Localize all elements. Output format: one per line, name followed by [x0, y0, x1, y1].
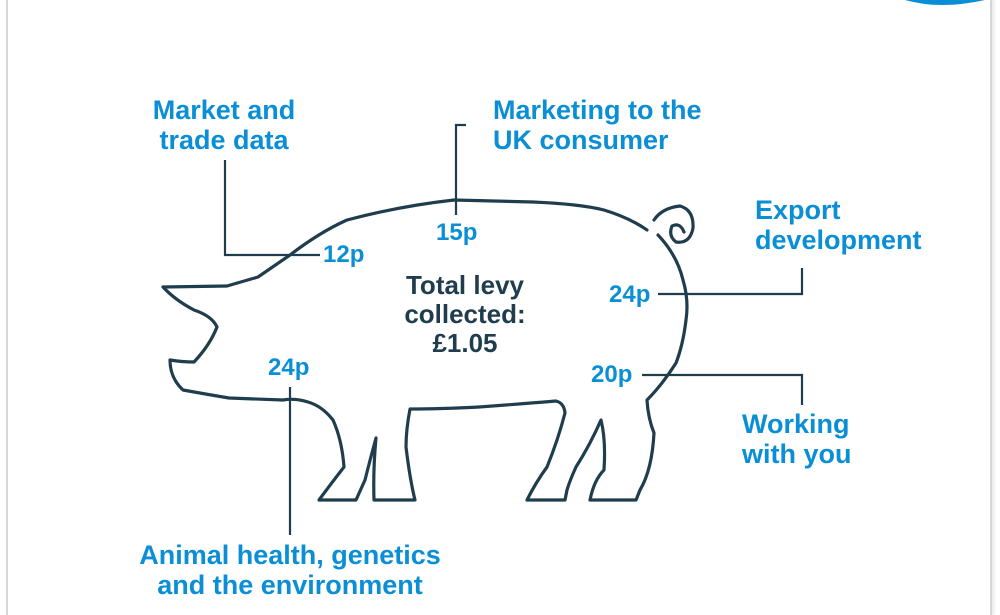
label: Marketing to the UK consumer	[493, 95, 702, 155]
value 15p: 15p	[436, 219, 477, 246]
label: Export development: development	[755, 225, 922, 255]
label: Working with you: with you	[742, 439, 852, 469]
label: Marketing to the UK consumer: UK consumer	[493, 125, 669, 155]
total levy text: Total levy	[406, 270, 524, 300]
total levy text	[404, 270, 526, 358]
label: Export development: Export	[755, 195, 841, 225]
value 24p animal: 24p	[268, 354, 309, 381]
label: Market and trade data: Market and	[153, 95, 295, 125]
value 12p: 12p	[323, 241, 364, 268]
label: Animal health	[139, 540, 441, 600]
label: Market and trade data	[153, 95, 295, 155]
label: Working with you: Working	[742, 409, 850, 439]
value 24p export: 24p	[609, 281, 650, 308]
label: Marketing to the UK consumer: Marketing to the	[493, 95, 702, 125]
label: Market and trade data: trade data	[159, 125, 289, 155]
total levy text: £1.05	[432, 328, 498, 358]
label: Animal health: and the environment	[157, 570, 423, 600]
top blue swoosh	[905, 0, 985, 5]
value 20p: 20p	[591, 361, 632, 388]
label: Export development	[755, 195, 922, 255]
leader lines	[225, 125, 802, 535]
pig outline	[163, 200, 693, 500]
label: Animal health: Animal health, genetics	[139, 540, 441, 570]
label: Working with you	[742, 409, 852, 469]
total levy text: collected:	[404, 299, 526, 329]
